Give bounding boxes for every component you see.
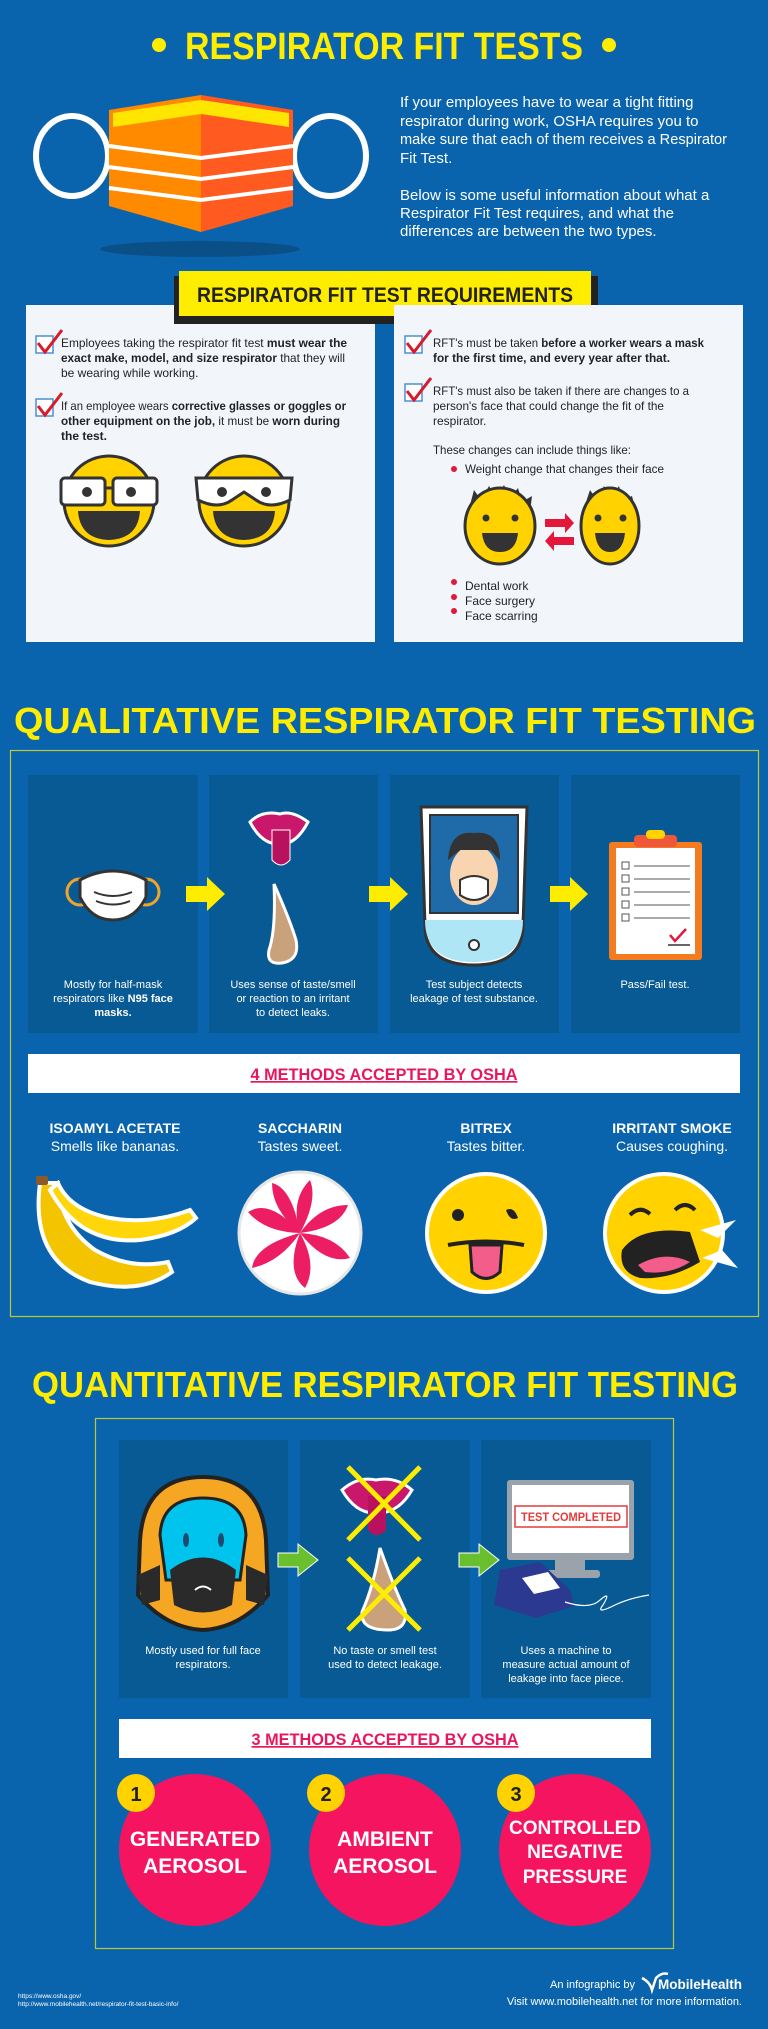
intro text: Respirator Fit Test requires, and what the [400,205,674,222]
footer credit: An infographic by [550,1979,635,1991]
method 1 [117,1774,271,1926]
check item 4: RFT's must also be taken if there are changes to a [433,384,689,398]
method 3 [497,1774,651,1926]
footer sources: http://www.mobilehealth.net/respirator-fit-test-basic-info/ [18,2001,179,2008]
method: isoamyl acetate: ISOAMYL ACETATE [50,1120,180,1136]
card: full face respirator [119,1440,288,1698]
check item 4 [405,378,689,476]
intro text: make sure that each of them receives a Respirator [400,131,727,148]
check item 2: other equipment on the job, it must be worn during [61,414,340,428]
bullet list: Dental work [465,579,529,593]
method: bitrex: BITREX [460,1120,512,1136]
arrow green 2 [459,1544,499,1576]
card: no taste/smell [300,1440,470,1698]
card 1: N95: masks. [94,1007,132,1019]
card 2: taste/smell [209,775,378,1033]
arrow 3 [550,877,588,911]
method: saccharin [239,1120,361,1294]
card: no taste/smell: used to detect leakage. [328,1659,442,1671]
check item 4: respirator. [433,414,486,428]
method: irritant smoke: Causes coughing. [616,1138,728,1154]
method 1: AEROSOL [143,1855,247,1878]
footer credit: Visit www.mobilehealth.net for more information. [507,1996,742,2008]
card 2: taste/smell: Uses sense of taste/smell [230,979,356,991]
card: no taste/smell: No taste or smell test [333,1645,437,1657]
arrow 1 [186,877,225,911]
method 2: AMBIENT [337,1828,433,1851]
heading: qualitative: QUALITATIVE RESPIRATOR FIT TESTING [14,700,756,741]
card 2: taste/smell: or reaction to an irritant [236,993,350,1005]
check item 2: If an employee wears corrective glasses or goggles or [61,399,346,413]
method 2: AEROSOL [333,1855,437,1878]
method: saccharin: SACCHARIN [258,1120,342,1136]
methods bar: 3 METHODS ACCEPTED BY OSHA [252,1730,518,1749]
heading: quantitative: QUANTITATIVE RESPIRATOR FIT TESTING [32,1364,738,1405]
card 1: N95: Mostly for half-mask [64,979,163,991]
method 3: NEGATIVE [527,1842,623,1863]
check item 3: for the first time, and every year after that. [433,351,670,365]
arrow green 1 [278,1544,318,1576]
icon: face with glasses [61,456,157,546]
method 1: GENERATED [130,1828,260,1851]
card 3: test subject [390,775,559,1033]
methods bar [119,1719,651,1758]
bullet list: Face scarring [465,609,538,623]
intro text [400,94,727,240]
card: machine: Uses a machine to [520,1645,612,1657]
methods bar: 4 METHODS ACCEPTED BY OSHA [250,1065,518,1084]
icon: weight change faces [465,485,639,564]
card 1: N95: respirators like N95 face [53,993,173,1005]
check item 1: exact make, model, and size respirator that they will [61,351,345,365]
card 4: clipboard [571,775,740,1033]
title: RESPIRATOR FIT TESTS [185,26,583,68]
method: saccharin: Tastes sweet. [258,1138,342,1154]
method 3: PRESSURE [523,1867,627,1888]
check item 2 [36,393,346,443]
method 1: 1 [130,1784,142,1806]
card: machine [481,1440,651,1698]
method 2: 2 [320,1784,332,1806]
card: full face respirator: Mostly used for full face [145,1645,261,1657]
check item 4: Weight change that changes their face [465,462,664,476]
panel: requirements right [394,305,743,642]
footer sources: https://www.osha.gov/ [18,1993,81,2000]
card 1: N95 [28,775,198,1033]
bullet list [451,579,538,623]
method: isoamyl acetate: Smells like bananas. [51,1138,179,1154]
card: machine: TEST COMPLETED [521,1512,621,1524]
icon: face with goggles [196,456,292,546]
icon: orange mask [36,95,366,257]
intro text: respirator during work, OSHA requires you to [400,113,698,130]
check item 3: RFT's must be taken before a worker wears a mask [433,336,704,350]
card 3: test subject: leakage of test substance. [410,993,538,1005]
method 3: CONTROLLED [509,1818,641,1839]
intro text: Fit Test. [400,150,452,167]
intro text: If your employees have to wear a tight fitting [400,94,694,111]
card 2: taste/smell: to detect leaks. [256,1007,330,1019]
card 3: test subject: Test subject detects [426,979,523,991]
intro text: differences are between the two types. [400,223,657,240]
card: full face respirator: respirators. [175,1659,231,1671]
card 4: clipboard: Pass/Fail test. [620,979,690,991]
footer credit: MobileHealth [658,1976,742,1992]
card: machine: leakage into face piece. [508,1673,624,1685]
check item 1: Employees taking the respirator fit test must wear the [61,336,347,350]
method 2 [307,1774,461,1926]
method: irritant smoke: IRRITANT SMOKE [612,1120,732,1136]
methods bar [28,1054,740,1093]
check item 2: the test. [61,429,107,443]
panel: quantitative [96,1418,674,1948]
panel: qualitative [10,750,758,1316]
check item 4: person's face that could change the fit of the [433,399,664,413]
check item 1 [36,330,347,380]
heading: requirements banner: RESPIRATOR FIT TEST REQUIREMENTS [197,284,573,307]
method: isoamyl acetate [36,1120,196,1287]
footer sources [18,1993,179,2008]
heading: requirements banner [174,271,598,324]
check item 4: These changes can include things like: [433,443,631,457]
card: machine: measure actual amount of [502,1659,631,1671]
method: irritant smoke [605,1120,738,1292]
panel: requirements left [26,305,375,642]
check item 3 [405,330,704,365]
check item 1: be wearing while working. [61,366,198,380]
bullet list: Face surgery [465,594,535,608]
method: bitrex: Tastes bitter. [447,1138,525,1154]
arrow 2 [369,877,408,911]
footer credit [507,1974,742,2008]
intro text: Below is some useful information about what a [400,187,710,204]
method 3: 3 [510,1784,522,1806]
method: bitrex [427,1120,545,1292]
